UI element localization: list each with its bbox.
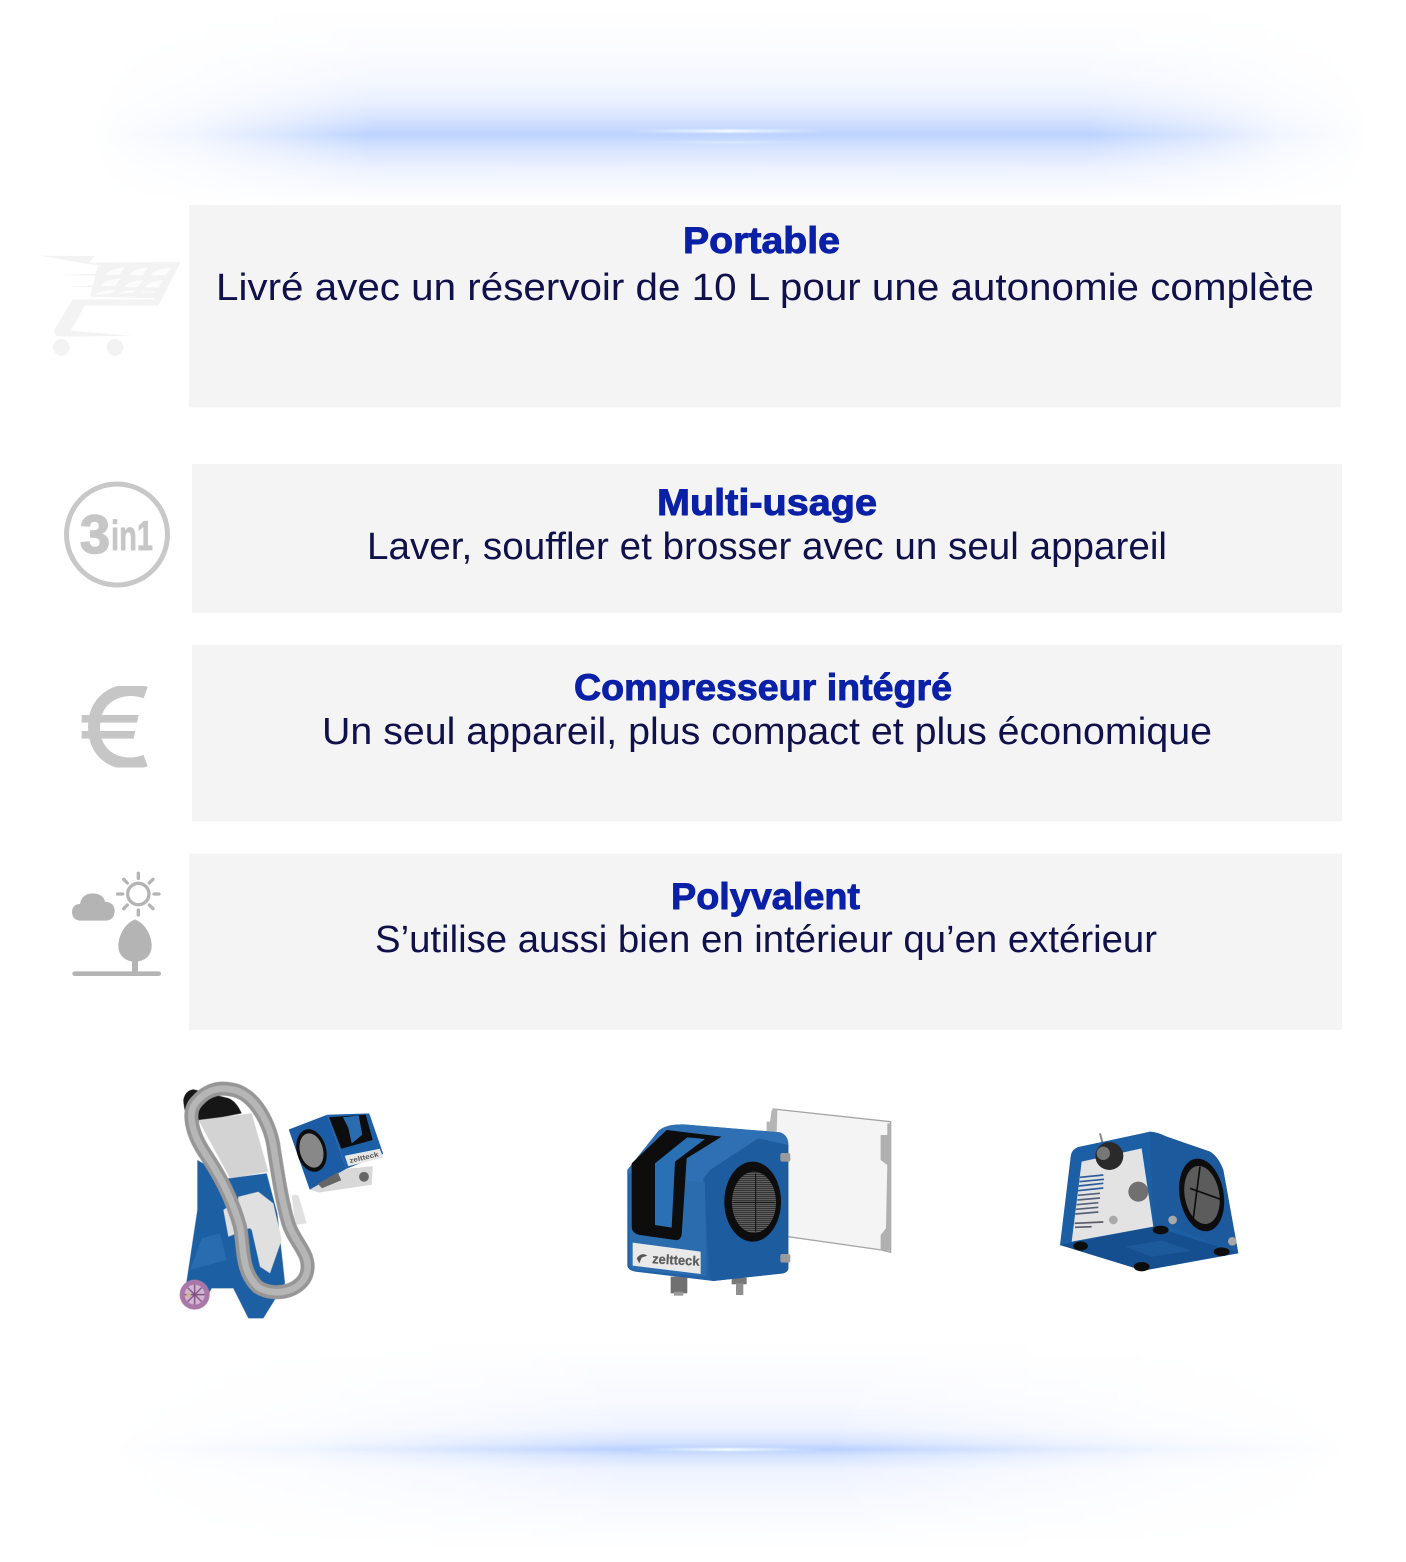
icon: outdoor and indoor [72, 873, 159, 974]
icon: shopping cart [40, 256, 181, 356]
fan [724, 1162, 781, 1242]
icon: euro [82, 690, 146, 763]
handle recess [632, 1130, 722, 1240]
detached unit [289, 1113, 383, 1192]
icon: 3 in 1: in1 [111, 512, 153, 559]
panel: Compresseur intégré [192, 645, 1342, 822]
heading: Compresseur intégré: Compresseur intégré [574, 667, 952, 708]
unit body [1060, 1132, 1238, 1271]
bottom [1060, 1227, 1238, 1271]
product: compressor unit with mounting plate [627, 1109, 891, 1296]
panel: Portable [189, 205, 1341, 408]
mounting plate [767, 1109, 891, 1252]
text: Multi-usage description: Laver, souffler et brosser avec un seul appareil [367, 526, 1167, 568]
wheel [180, 1280, 210, 1310]
top light glow [150, 72, 1317, 188]
heading: Multi-usage: Multi-usage [657, 482, 877, 523]
fan [1174, 1155, 1230, 1235]
trolley body [186, 1160, 285, 1318]
label [633, 1243, 701, 1274]
rear connectors [1095, 1142, 1123, 1170]
icon: 3 in 1 [66, 484, 168, 585]
connectors [671, 1277, 747, 1296]
panel: Polyvalent [189, 854, 1342, 1030]
trolley handle [183, 1089, 242, 1133]
unit body [627, 1124, 788, 1281]
text: Polyvalent description: S’utilise aussi bien en intérieur qu’en extérieur [375, 919, 1157, 961]
product: portable trolley with hose and unit [180, 1089, 383, 1318]
heading: Portable: Portable [683, 220, 840, 261]
hose [191, 1089, 308, 1292]
text: Compresseur description: Un seul appareil, plus compact et plus économique [322, 711, 1212, 753]
trolley lower panels [223, 1192, 307, 1273]
detached unit: zeltteck [349, 1151, 380, 1165]
icon: 3 in 1: 3 [80, 505, 110, 565]
text: Portable description: Livré avec un réservoir de 10 L pour une autonomie complète [216, 267, 1314, 309]
bolts [1168, 1216, 1237, 1246]
product: compressor unit with mounting plate: zeltteck [652, 1251, 700, 1269]
rear plate [1072, 1148, 1153, 1242]
feet [1073, 1226, 1230, 1271]
panel: Multi-usage [192, 464, 1342, 613]
bottom light glow [220, 1403, 1239, 1504]
heading: Polyvalent: Polyvalent [671, 876, 860, 917]
bolts [780, 1153, 790, 1263]
product: compressor unit rear view [1060, 1132, 1238, 1271]
trolley upper panel [198, 1113, 268, 1178]
rating label [1075, 1175, 1104, 1227]
